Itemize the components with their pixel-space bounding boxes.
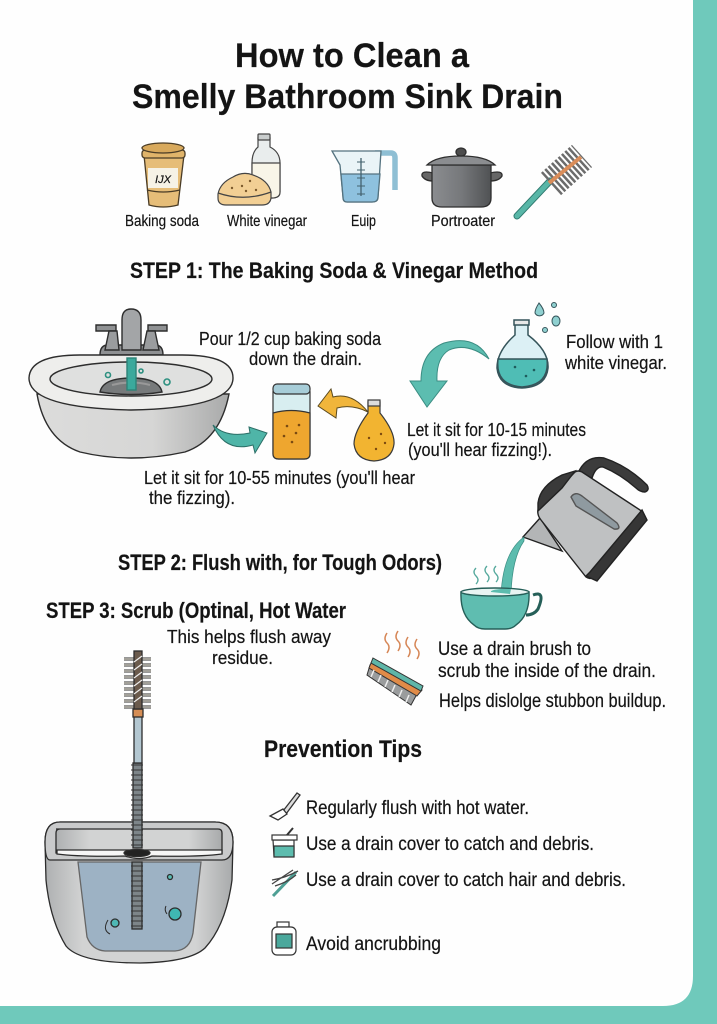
icon: steam bbox=[474, 566, 498, 584]
icon: yellow flask bbox=[354, 400, 394, 461]
arrow: sink to jar bbox=[213, 425, 267, 453]
icon: baking soda jar: IJX bbox=[155, 174, 172, 186]
label: white vinegar: White vinegar bbox=[227, 213, 308, 230]
list: prevention tips bbox=[270, 793, 626, 955]
heading: prevention tips: Prevention Tips bbox=[264, 736, 422, 763]
text: let it sit left: the fizzing). bbox=[149, 487, 235, 508]
text: follow with vinegar: Follow with 1 bbox=[566, 331, 663, 352]
icon: hair strands bbox=[272, 870, 298, 896]
text: pour baking soda: down the drain. bbox=[249, 348, 362, 369]
text: let it sit left: Let it sit for 10-55 minutes (you'll hear bbox=[144, 467, 415, 488]
text: use a drain brush: Helps dislolge stubbon buildup. bbox=[439, 691, 666, 712]
heading: step 2: STEP 2: Flush with, for Tough Odors) bbox=[118, 550, 442, 575]
panel: supplies bbox=[125, 134, 582, 230]
water stream bbox=[501, 537, 524, 595]
text: helps flush: residue. bbox=[212, 647, 273, 668]
icon: scrub brush bbox=[517, 156, 582, 216]
text: pour baking soda bbox=[199, 328, 382, 369]
label: cup: Euip bbox=[351, 213, 376, 230]
title: How to Clean a bbox=[235, 37, 470, 75]
text: helps flush: This helps flush away bbox=[167, 626, 332, 647]
icon: fizzing jar bbox=[273, 384, 310, 459]
icon: measuring cup bbox=[332, 151, 395, 202]
tip: avoid: Avoid ancrubbing bbox=[306, 934, 441, 955]
illustration: drain brush in sink bbox=[45, 651, 233, 963]
title bbox=[132, 37, 563, 116]
illustration: sink bbox=[29, 309, 233, 458]
icon: cup bbox=[461, 588, 541, 629]
text: use a drain brush: Use a drain brush to bbox=[438, 639, 591, 660]
icon: hand brush with heat bbox=[367, 631, 423, 705]
icon: bottle bbox=[272, 922, 296, 955]
text: let it sit left bbox=[144, 467, 415, 508]
heading: step 3: STEP 3: Scrub (Optinal, Hot Water bbox=[46, 598, 346, 623]
icon: baking soda jar bbox=[142, 143, 185, 207]
heading: step 1: STEP 1: The Baking Soda & Vinegar Method bbox=[130, 258, 538, 283]
text: let it sit right bbox=[407, 419, 586, 460]
text: use a drain brush: scrub the inside of the drain. bbox=[438, 661, 656, 682]
icon: pot bbox=[422, 148, 502, 207]
label: pot: Portroater bbox=[431, 213, 496, 230]
icon: small brush bbox=[270, 793, 300, 820]
text: pour baking soda: Pour 1/2 cup baking soda bbox=[199, 328, 382, 349]
title: Smelly Bathroom Sink Drain bbox=[132, 78, 563, 116]
tip: flush with hot water: Regularly flush with hot water. bbox=[306, 798, 529, 819]
label: baking soda: Baking soda bbox=[125, 213, 199, 230]
icon: droplets bbox=[535, 302, 560, 332]
tip: hair and debris: Use a drain cover to catch hair and debris. bbox=[306, 870, 626, 891]
arrow: flask to jar bbox=[318, 389, 368, 418]
text: follow with vinegar: white vinegar. bbox=[564, 352, 667, 373]
text: follow with vinegar bbox=[564, 331, 667, 373]
icon: container bbox=[272, 828, 297, 857]
arrow: vinegar flask curve bbox=[410, 341, 489, 407]
icon: white vinegar bottle and soda pile bbox=[218, 134, 280, 205]
text: let it sit right: Let it sit for 10-15 minutes bbox=[407, 419, 586, 440]
icon: vinegar flask bbox=[497, 320, 548, 388]
illustration: kettle bbox=[523, 458, 648, 581]
text: helps flush bbox=[167, 626, 332, 668]
text: let it sit right: (you'll hear fizzing!). bbox=[408, 439, 552, 460]
text: use a drain brush bbox=[438, 639, 666, 712]
tip: drain cover: Use a drain cover to catch and debris. bbox=[306, 834, 594, 855]
